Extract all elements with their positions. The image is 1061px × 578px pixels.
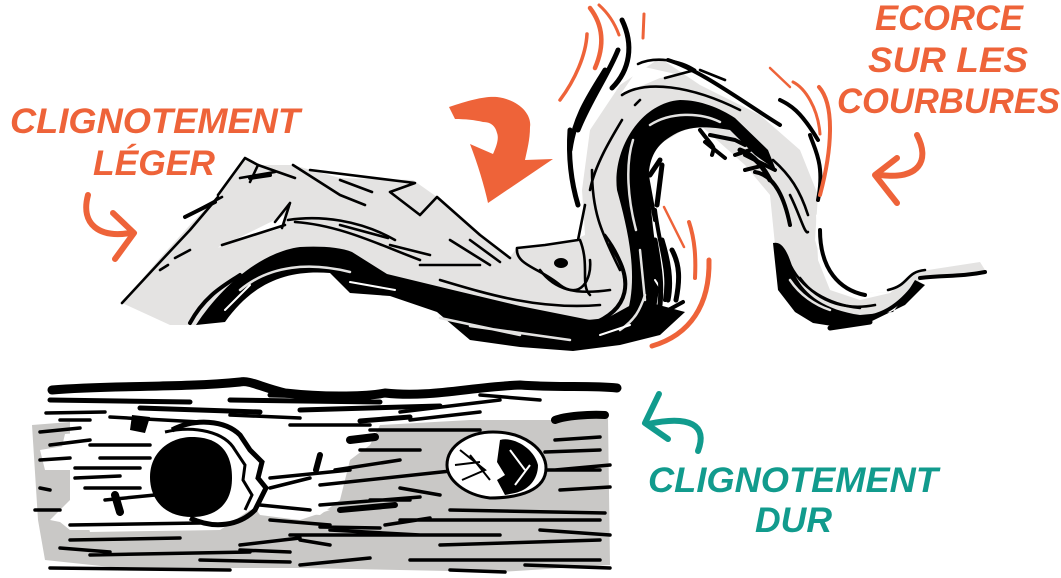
motion lines: upper left bend xyxy=(560,5,644,100)
motion lines: right bend xyxy=(770,68,830,195)
log illustration xyxy=(32,382,617,572)
knot spot xyxy=(554,258,568,268)
label: clignotement léger: CLIGNOTEMENT xyxy=(10,102,303,141)
motion lines: lower bend xyxy=(652,207,709,346)
knot patch xyxy=(130,415,150,433)
branch illustration xyxy=(122,20,985,351)
label: écorce sur les courbures: SUR LES xyxy=(868,41,1028,80)
label: écorce sur les courbures: ECORCE xyxy=(875,0,1025,38)
label: clignotement dur xyxy=(648,461,941,540)
label: écorce sur les courbures: COURBURES xyxy=(837,82,1060,121)
label: clignotement léger: LÉGER xyxy=(93,144,216,183)
arrow: léger xyxy=(86,195,134,259)
label: clignotement léger xyxy=(10,102,303,183)
arrow: courbures xyxy=(875,135,922,203)
arrow: large orange pointing to the bend xyxy=(449,97,553,203)
arrow: clignotement dur xyxy=(645,394,701,451)
label: clignotement dur: CLIGNOTEMENT xyxy=(648,461,941,500)
ink streaks xyxy=(240,115,830,340)
label: écorce sur les courbures xyxy=(837,0,1060,121)
ink masses xyxy=(196,100,925,351)
label: clignotement dur: DUR xyxy=(755,501,833,540)
large knot xyxy=(150,422,266,525)
small knot xyxy=(447,432,546,498)
